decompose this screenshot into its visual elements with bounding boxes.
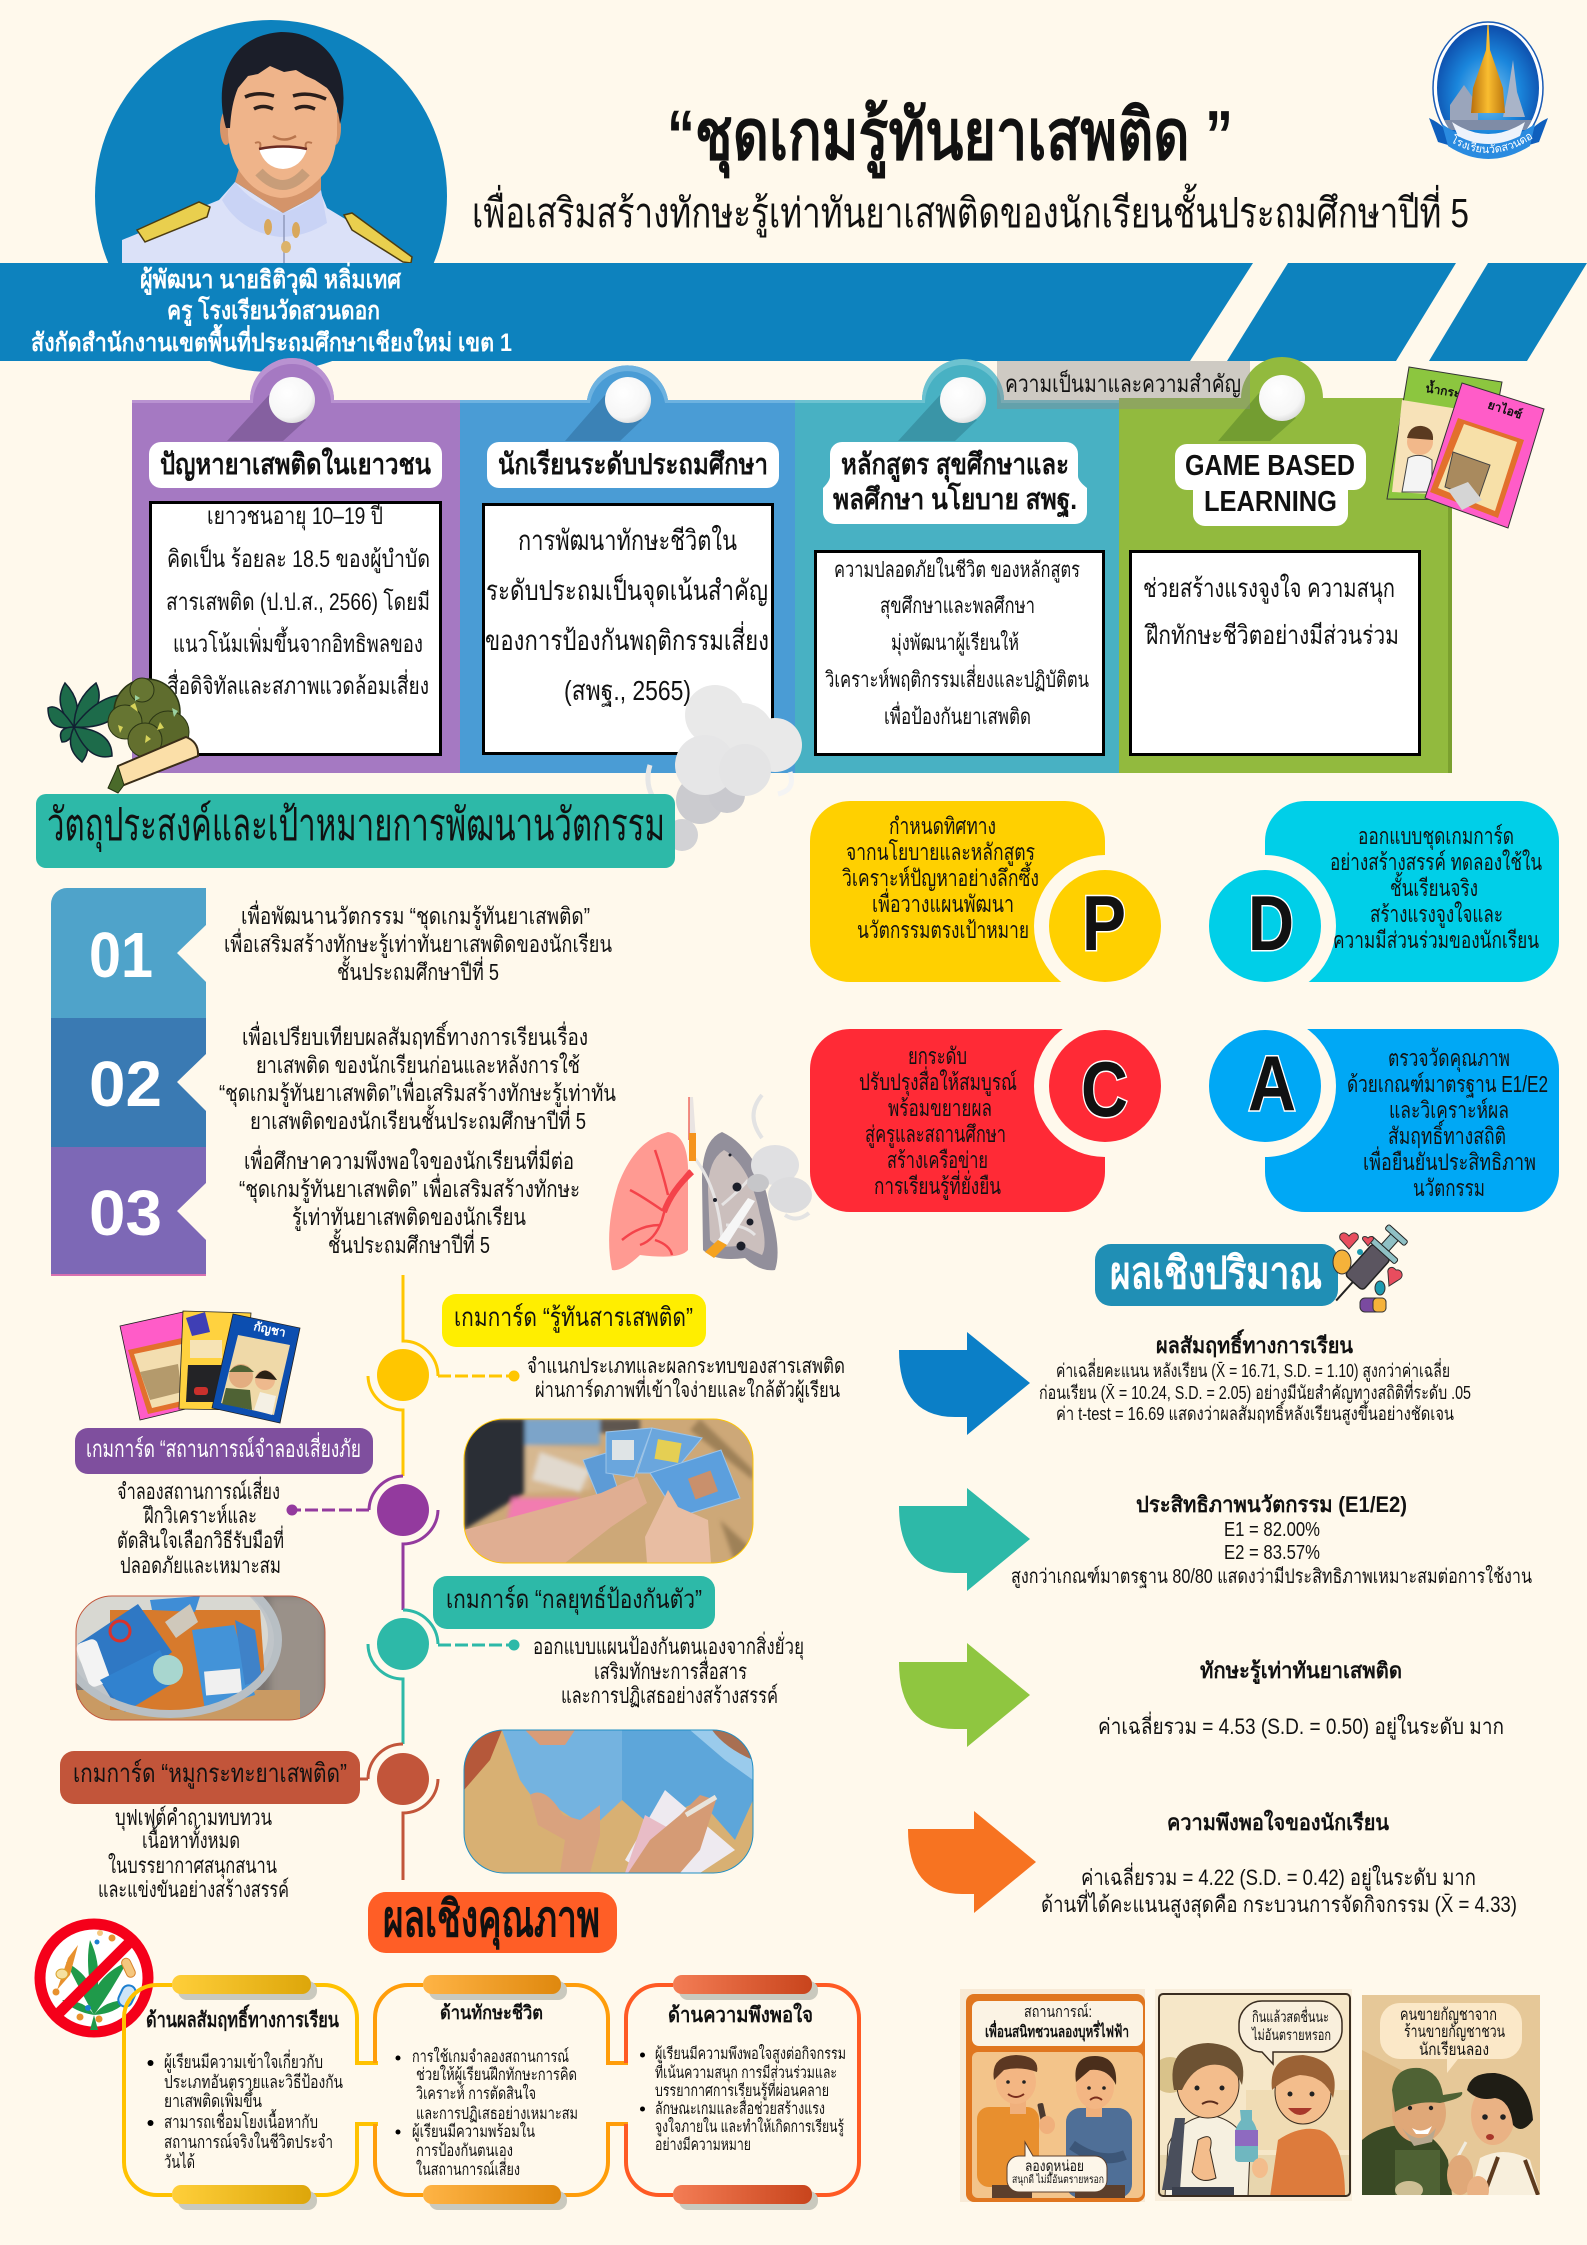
photo: cards in a bowl <box>76 1596 326 1720</box>
panel body text: ระดับประถมเป็นจุดเน้นสำคัญ <box>486 573 768 608</box>
game 4: quiz buffet: และแข่งขันอย่างสร้างสรรค์ <box>98 1877 289 1902</box>
objective 02: 02 <box>89 1048 162 1120</box>
developer credit <box>31 262 512 357</box>
card: life skills outcome: ด้านทักษะชีวิต <box>440 2002 543 2024</box>
icon: school logo <box>1429 21 1548 159</box>
panel body text: วิเคราะห์พฤติกรรมเสี่ยงและปฏิบัติตน <box>825 664 1089 692</box>
section label: background and significance <box>997 361 1250 409</box>
PDCA: C check <box>810 1015 1176 1212</box>
result: student satisfaction <box>1041 1809 1517 1918</box>
panel: primary school students <box>460 365 795 773</box>
PDCA: C check: C <box>1081 1045 1128 1133</box>
game 3: protection strategy: เสริมทักษะการสื่อสาร <box>594 1656 747 1684</box>
panel heading: นักเรียนระดับประถมศึกษา <box>498 449 768 481</box>
icon: game cards top right <box>1387 367 1544 528</box>
game 1: drug awareness: จำแนกประเภทและผลกระทบของสารเสพติด <box>527 1355 845 1378</box>
icon: lungs healthy and damaged <box>609 1095 812 1270</box>
panel heading: ปัญหายาเสพติดในเยาวชน <box>160 447 431 482</box>
game 2: simulated risk situations: ฝึกวิเคราะห์และ <box>142 1503 257 1528</box>
panel body text: เยาวชนอายุ 10–19 ปี <box>207 503 383 531</box>
objective 02: ยาเสพติด ของนักเรียนก่อนและหลังการใช้ <box>256 1052 580 1078</box>
PDCA: A act: เพื่อยืนยันประสิทธิภาพ <box>1363 1146 1536 1175</box>
panel: game based learning <box>1119 357 1452 773</box>
objective 02: เพื่อเปรียบเทียบผลสัมฤทธิ์ทางการเรียนเรื่อง <box>242 1020 588 1050</box>
panel body text <box>150 502 440 754</box>
developer credit: ครู โรงเรียนวัดสวนดอก <box>167 295 380 327</box>
result: student satisfaction: ค่าเฉลี่ยรวม = 4.22 (S.D. = 0.42) อยู่ในระดับ มาก <box>1081 1862 1476 1891</box>
card: achievement outcome: สามารถเชื่อมโยงเนื้อหากับ <box>164 2109 318 2132</box>
result: awareness skill: ค่าเฉลี่ยรวม = 4.53 (S.D. = 0.50) อยู่ในระดับ มาก <box>1098 1711 1504 1740</box>
icon: card trio: กัญชา <box>252 1319 287 1340</box>
panel heading <box>823 442 1087 524</box>
pin <box>1259 375 1305 421</box>
result: innovation efficiency <box>1011 1492 1532 1589</box>
speech bubble: ไม่อันตรายหรอก <box>1251 2026 1331 2044</box>
panel body text: สื่อดิจิทัลและสภาพแวดล้อมเสี่ยง <box>167 669 429 700</box>
objective 02: “ชุดเกมรู้ทันยาเสพติด”เพื่อเสริมสร้างทักษะรู้เท่าทัน <box>219 1077 616 1107</box>
speech bubble: คนขายกัญชาจาก <box>1400 2005 1497 2024</box>
card: life skills outcome: การป้องกันตนเอง <box>416 2141 513 2160</box>
icon: card trio <box>120 1311 300 1423</box>
card: satisfaction outcome: ด้านความพึงพอใจ <box>668 2002 813 2027</box>
panel heading <box>149 442 442 488</box>
arrow: awareness <box>899 1643 1030 1747</box>
PDCA: P plan: เพื่อวางแผนพัฒนา <box>872 888 1014 917</box>
card: life skills outcome: วิเคราะห์ การตัดสินใจ <box>416 2083 536 2103</box>
card: achievement outcome <box>124 1975 378 2210</box>
icon: game cards top right: ยาไอซ์ <box>1486 397 1524 422</box>
result: awareness skill <box>1098 1658 1504 1740</box>
card: achievement outcome: วันได้ <box>164 2151 195 2172</box>
panel heading <box>487 442 779 488</box>
objective 02: ยาเสพติดของนักเรียนชั้นประถมศึกษาปีที่ 5 <box>250 1105 586 1134</box>
speech bubble: นักเรียนลอง <box>1419 2040 1489 2059</box>
arrow: achievement <box>899 1332 1030 1435</box>
card: achievement outcome: สถานการณ์จริงในชีวิตประจำ <box>164 2131 333 2152</box>
objective 03 <box>51 1145 580 1276</box>
panel body text: การพัฒนาทักษะชีวิตใน <box>518 524 737 556</box>
panel body text: สุขศึกษาและพลศึกษา <box>880 593 1035 619</box>
icon: smoke cloud <box>648 685 802 851</box>
objective 02 <box>51 1018 616 1147</box>
icon: no drugs sign <box>40 1924 148 2032</box>
game 1: drug awareness: ผ่านการ์ดภาพที่เข้าใจง่ายและใกล้ตัวผู้เรียน <box>535 1375 840 1403</box>
title: “ชุดเกมรู้ทันยาเสพติด ” <box>667 96 1233 179</box>
result: innovation efficiency: E1 = 82.00% <box>1224 1519 1320 1541</box>
panel body text: เพื่อป้องกันยาเสพติด <box>884 701 1031 729</box>
PDCA: C check: พร้อมขยายผล <box>888 1095 992 1121</box>
objective 03: ชั้นประถมศึกษาปีที่ 5 <box>328 1229 490 1258</box>
PDCA: P plan: นวัตกรรมตรงเป้าหมาย <box>857 917 1029 943</box>
game 3: protection strategy: เกมการ์ด “กลยุทธ์ป้องกันตัว” <box>446 1584 702 1615</box>
icon: cannabis and joint <box>48 678 198 793</box>
panel body text <box>1130 552 1420 754</box>
PDCA: D do <box>1194 801 1559 997</box>
game 2: simulated risk situations: ตัดสินใจเลือกวิธีรับมือที่ <box>117 1525 284 1553</box>
objective 01: เพื่อเสริมสร้างทักษะรู้เท่าทันยาเสพติดของนักเรียน <box>224 928 612 958</box>
developer credit: ผู้พัฒนา นายธิติวุฒิ หลิ่มเทศ <box>140 262 402 296</box>
comic 2: energy drink offer <box>1152 1989 1352 2201</box>
speech bubble: ร้านขายกัญชาชวน <box>1404 2022 1505 2041</box>
result: learning achievement: ค่าเฉลี่ยคะแนน หลังเรียน (X̄ = 16.71, S.D. = 1.10) สูงกว่าค่าเฉลี่ย <box>1056 1358 1450 1382</box>
game 2: simulated risk situations: ปลอดภัยและเหมาะสม <box>120 1553 281 1578</box>
game 3: protection strategy <box>377 1576 804 1708</box>
result: innovation efficiency: E2 = 83.57% <box>1224 1542 1320 1564</box>
speech bubble <box>1007 2142 1107 2192</box>
developer credit: สังกัดสำนักงานเขตพื้นที่ประถมศึกษาเชียงใหม่ เขต 1 <box>31 323 512 357</box>
PDCA: P plan <box>810 801 1176 997</box>
qualitative results heading: ผลเชิงคุณภาพ <box>383 1891 600 1950</box>
PDCA: D do: D <box>1248 879 1294 967</box>
panel heading: LEARNING <box>1204 486 1337 518</box>
speech bubble: ลองดูหน่อย <box>1025 2158 1084 2175</box>
PDCA: A act: นวัตกรรม <box>1413 1175 1485 1201</box>
PDCA: D do: ออกแบบชุดเกมการ์ด <box>1358 823 1514 850</box>
panel body text: แนวโน้มเพิ่มขึ้นจากอิทธิพลของ <box>173 626 423 658</box>
card: achievement outcome: ด้านผลสัมฤทธิ์ทางการเรียน <box>146 2004 339 2032</box>
panel body text <box>484 504 772 754</box>
PDCA: D do: สร้างแรงจูงใจและ <box>1370 901 1503 928</box>
panel body text: สารเสพติด (ป.ป.ส., 2566) โดยมี <box>166 588 430 616</box>
PDCA: C check: ยกระดับ <box>908 1043 967 1069</box>
objective 03: “ชุดเกมรู้ทันยาเสพติด” เพื่อเสริมสร้างทักษะ <box>239 1173 580 1203</box>
objective 01: ชั้นประถมศึกษาปีที่ 5 <box>337 956 499 985</box>
result: student satisfaction: ความพึงพอใจของนักเรียน <box>1167 1809 1389 1835</box>
panel heading: พลศึกษา นโยบาย สพฐ. <box>833 481 1077 518</box>
result: innovation efficiency: ประสิทธิภาพนวัตกรรม (E1/E2) <box>1136 1492 1407 1517</box>
panel body text: (สพฐ., 2565) <box>564 675 691 707</box>
panel heading: หลักสูตร สุขศึกษาและ <box>841 449 1069 482</box>
PDCA: P plan: วิเคราะห์ปัญหาอย่างลึกซึ้ง <box>842 862 1039 891</box>
icon: syringe pills hearts <box>1324 1221 1412 1313</box>
timeline <box>296 1275 510 1880</box>
comic 3: cannabis seller <box>1362 1995 1540 2204</box>
pin <box>940 377 986 423</box>
game 4: quiz buffet: ในบรรยากาศสนุกสนาน <box>108 1853 277 1879</box>
card: life skills outcome: การใช้เกมจำลองสถานการณ์ <box>412 2046 569 2066</box>
panel body text: ช่วยสร้างแรงจูงใจ ความสนุก <box>1143 573 1395 604</box>
section label: background and significance: ความเป็นมาและความสำคัญ <box>1005 369 1241 398</box>
photo: hands holding blue cards <box>464 1419 753 1563</box>
quantitative results heading: ผลเชิงปริมาณ <box>1110 1249 1322 1298</box>
result: student satisfaction: ด้านที่ได้คะแนนสูงสุดคือ กระบวนการจัดกิจกรรม (X̄ = 4.33) <box>1041 1889 1517 1918</box>
PDCA: C check: สร้างเครือข่าย <box>887 1147 988 1173</box>
card: satisfaction outcome: ลักษณะเกมและสื่อช่วยสร้างแรง <box>655 2097 825 2118</box>
panel: youth drug problem <box>132 358 460 773</box>
objectives heading: วัตถุประสงค์และเป้าหมายการพัฒนานวัตกรรม <box>47 799 665 852</box>
result: learning achievement: ก่อนเรียน (X̄ = 10.24, S.D. = 2.05) อย่างมีนัยสำคัญทางสถิติที่ระดับ .05 <box>1039 1380 1471 1404</box>
pin <box>269 377 315 423</box>
game 3: protection strategy: ออกแบบแผนป้องกันตนเองจากสิ่งยั่วยุ <box>533 1631 804 1660</box>
PDCA: A act: สัมฤทธิ์ทางสถิติ <box>1388 1119 1506 1149</box>
card: life skills outcome: ผู้เรียนมีความพร้อมใน <box>412 2121 535 2142</box>
game 4: quiz buffet: บุฟเฟต์คำถามทบทวน <box>115 1805 272 1831</box>
card: life skills outcome: ในสถานการณ์เสี่ยง <box>416 2157 520 2179</box>
game 1: drug awareness: เกมการ์ด “รู้ทันสารเสพติด” <box>454 1302 693 1333</box>
scenario caption: เพื่อนสนิทชวนลองบุหรี่ไฟฟ้า <box>985 2020 1129 2042</box>
card: satisfaction outcome <box>626 1975 859 2210</box>
qualitative results heading <box>368 1891 617 1953</box>
card: satisfaction outcome: บรรยากาศการเรียนรู้ที่ผ่อนคลาย <box>655 2079 829 2101</box>
result: awareness skill: ทักษะรู้เท่าทันยาเสพติด <box>1200 1658 1402 1685</box>
PDCA: P plan: กำหนดทิศทาง <box>889 813 996 839</box>
PDCA: D do: ชั้นเรียนจริง <box>1390 872 1478 901</box>
PDCA: A act <box>1194 1015 1559 1212</box>
card: satisfaction outcome: ที่เน้นความสนุก การมีส่วนร่วมและ <box>655 2061 837 2083</box>
PDCA: A act: A <box>1248 1039 1296 1127</box>
game 2: simulated risk situations <box>75 1428 429 1578</box>
pin <box>605 377 651 423</box>
panel: health curriculum <box>795 359 1119 773</box>
result: learning achievement: ค่า t-test = 16.69 แสดงว่าผลสัมฤทธิ์หลังเรียนสูงขึ้นอย่างชัดเจน <box>1056 1400 1454 1425</box>
card: achievement outcome: ผู้เรียนมีความเข้าใจเกี่ยวกับ <box>164 2049 323 2073</box>
quantitative results heading <box>1095 1244 1338 1306</box>
objective 03: 03 <box>89 1177 162 1249</box>
objective 01: 01 <box>89 919 153 991</box>
panel heading: GAME BASED <box>1185 450 1355 482</box>
icon: game cards top right: น้ำกระ <box>1425 378 1462 400</box>
game 4: quiz buffet: เนื้อหาทั้งหมด <box>142 1825 240 1853</box>
card: satisfaction outcome: อย่างมีความหมาย <box>655 2136 751 2154</box>
PDCA: P plan: P <box>1082 879 1126 967</box>
arrow: satisfaction <box>908 1811 1036 1913</box>
PDCA: C check: สู่ครูและสถานศึกษา <box>865 1121 1006 1148</box>
objective 03: รู้เท่าทันยาเสพติดของนักเรียน <box>292 1204 526 1231</box>
card: life skills outcome <box>375 1975 628 2210</box>
PDCA: A act: ตรวจวัดคุณภาพ <box>1388 1045 1510 1072</box>
PDCA: P plan: จากนโยบายและหลักสูตร <box>846 839 1035 866</box>
card: achievement outcome: ยาเสพติดเพิ่มขึ้น <box>164 2088 262 2111</box>
card: life skills outcome: และการปฏิเสธอย่างเหมาะสม <box>416 2104 578 2123</box>
speech bubble: สนุกดี ไม่มีอันตรายหรอก <box>1012 2173 1104 2186</box>
PDCA: A act: และวิเคราะห์ผล <box>1389 1097 1509 1123</box>
PDCA: C check: ปรับปรุงสื่อให้สมบูรณ์ <box>859 1066 1017 1096</box>
panel body text: ของการป้องกันพฤติกรรมเสี่ยง <box>485 621 769 656</box>
game 3: protection strategy: และการปฏิเสธอย่างสร้างสรรค์ <box>561 1683 778 1708</box>
objective 01 <box>51 888 612 1018</box>
panel heading <box>1175 444 1366 526</box>
game 2: simulated risk situations: จำลองสถานการณ์เสี่ยง <box>117 1476 280 1504</box>
game 1: drug awareness <box>377 1294 845 1403</box>
arrow: efficiency <box>899 1488 1030 1591</box>
scenario caption: สถานการณ์: <box>1024 2002 1092 2021</box>
presenter portrait <box>95 20 447 372</box>
card: satisfaction outcome: ผู้เรียนมีความพึงพอใจสูงต่อกิจกรรม <box>655 2044 846 2064</box>
panel body text <box>816 552 1104 754</box>
speech bubble <box>1239 2001 1342 2064</box>
speech bubble <box>1380 2003 1522 2073</box>
panel body text: มุ่งพัฒนาผู้เรียนให้ <box>891 630 1019 656</box>
result: learning achievement: ผลสัมฤทธิ์ทางการเรียน <box>1156 1329 1353 1358</box>
objective 03: เพื่อศึกษาความพึงพอใจของนักเรียนที่มีต่อ <box>244 1145 574 1174</box>
header band <box>0 263 1587 361</box>
scenario caption <box>972 2001 1143 2046</box>
panel body text: ฝึกทักษะชีวิตอย่างมีส่วนร่วม <box>1144 620 1399 650</box>
speech bubble: กินแล้วสดชื่นนะ <box>1252 2006 1329 2026</box>
game 2: simulated risk situations: เกมการ์ด “สถานการณ์จำลองเสี่ยงภัย <box>86 1432 361 1463</box>
result: learning achievement <box>1039 1329 1471 1425</box>
panel body text: คิดเป็น ร้อยละ 18.5 ของผู้บำบัด <box>167 544 430 574</box>
card: life skills outcome: ช่วยให้ผู้เรียนฝึกทักษะการคิด <box>416 2064 577 2085</box>
photo: students at table <box>464 1730 753 1873</box>
objectives heading <box>36 794 675 868</box>
game 4: quiz buffet: เกมการ์ด “หมูกระทะยาเสพติด” <box>73 1758 347 1789</box>
objective 01: เพื่อพัฒนานวัตกรรม “ชุดเกมรู้ทันยาเสพติด” <box>241 900 590 930</box>
game 4: quiz buffet <box>60 1751 429 1902</box>
card: satisfaction outcome: จูงใจภายใน และทำให้เกิดการเรียนรู้ <box>655 2117 844 2137</box>
comic 1: e-cigarette scenario <box>960 1989 1145 2202</box>
card: achievement outcome: ประเภทอันตรายและวิธีป้องกัน <box>164 2072 343 2092</box>
PDCA: C check: การเรียนรู้ที่ยั่งยืน <box>874 1170 1001 1200</box>
panel body text: ความปลอดภัยในชีวิต ของหลักสูตร <box>834 557 1080 583</box>
